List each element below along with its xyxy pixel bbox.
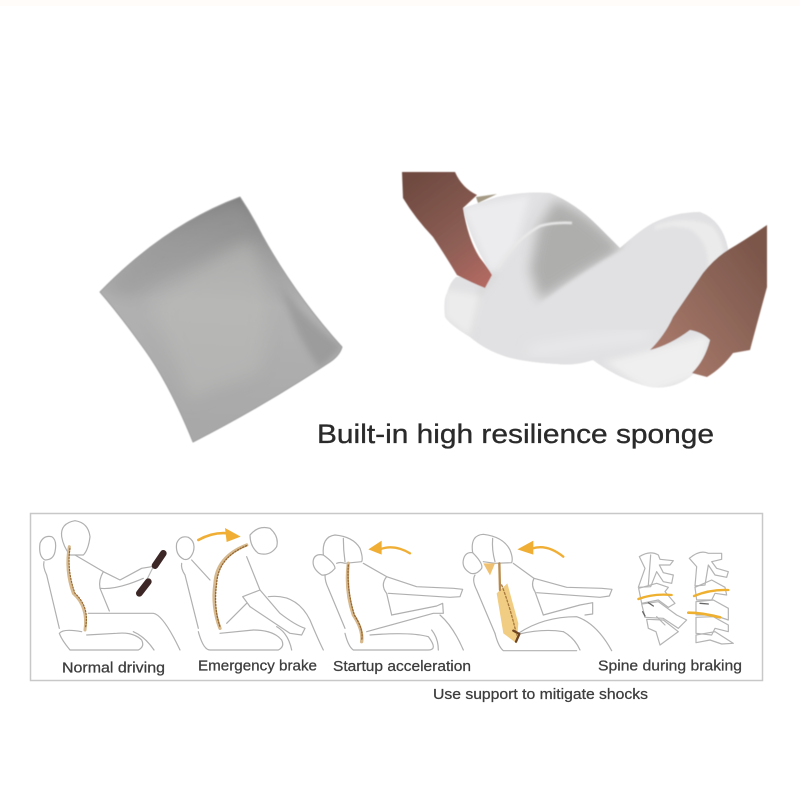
right spine bbox=[689, 552, 728, 586]
top edge tint bbox=[0, 0, 800, 6]
panel frame bbox=[30, 514, 762, 680]
right hand bbox=[650, 225, 767, 377]
foam body bbox=[444, 192, 735, 392]
left hand bbox=[402, 172, 492, 288]
figure: spine during braking bbox=[638, 552, 733, 645]
label: startup acceleration: Startup acceleration bbox=[333, 659, 471, 675]
foam sponge being twisted by hands bbox=[402, 172, 767, 392]
figure: normal driving bbox=[40, 521, 180, 650]
orange arrows bbox=[638, 595, 672, 599]
label: emergency brake: Emergency brake bbox=[198, 658, 317, 674]
label: normal driving: Normal driving bbox=[62, 660, 165, 676]
figure: emergency brake bbox=[176, 527, 323, 650]
left spine bbox=[638, 553, 673, 587]
figure: use of support bbox=[463, 534, 612, 651]
caption: use support to mitigate shocks: Use support to mitigate shocks bbox=[433, 687, 648, 703]
heading: built-in high resilience sponge: Built-in high resilience sponge bbox=[317, 419, 714, 449]
figure: startup acceleration bbox=[313, 535, 463, 650]
panel: driving posture diagram bbox=[30, 514, 762, 680]
dark marks bbox=[643, 603, 708, 616]
pillow photo bbox=[100, 197, 342, 442]
label: spine during braking: Spine during braking bbox=[598, 658, 742, 674]
